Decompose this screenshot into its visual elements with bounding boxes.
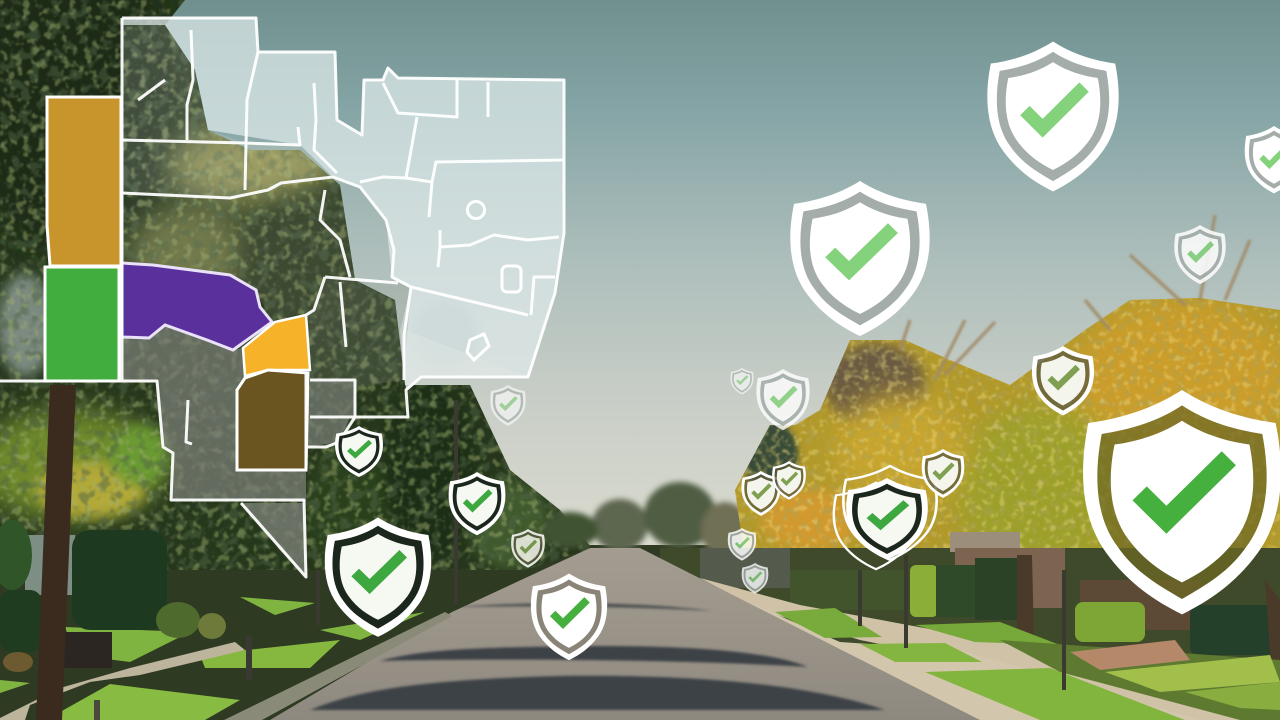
- left hedges and bench: [0, 385, 252, 720]
- right sidewalk and lawns: [650, 568, 1280, 720]
- region map: [0, 18, 564, 577]
- shield: road: [531, 574, 607, 660]
- region: green: [45, 267, 119, 381]
- shield: middle: [790, 181, 930, 336]
- shield: right edge: [1245, 126, 1280, 193]
- shield: centre tree: [449, 472, 505, 535]
- distant trees: [542, 482, 749, 558]
- shield: map coast: [490, 385, 526, 426]
- shield: cluster small: [922, 449, 964, 498]
- bare branches: [900, 215, 1250, 380]
- shield: roadside a: [728, 528, 756, 561]
- shield: cluster: [846, 478, 928, 560]
- ground behind houses: [660, 548, 1280, 720]
- shield: cluster ghost outlines: [834, 466, 937, 569]
- left lawns: [0, 597, 425, 720]
- region: olive: [237, 370, 308, 470]
- shield: large right: [1083, 390, 1280, 614]
- mist behind map: [413, 300, 477, 370]
- left trees: [0, 0, 620, 590]
- shields: [325, 42, 1280, 660]
- shield: map bottom: [335, 426, 383, 477]
- street poles: [318, 400, 1064, 690]
- right houses and hedges: [700, 532, 1280, 680]
- shield: tree a: [741, 471, 781, 516]
- right trees: [735, 298, 1280, 548]
- shield: roadside b: [742, 563, 768, 594]
- curb left: [224, 612, 452, 720]
- shield: centre small: [756, 369, 810, 430]
- map translucent regions: [122, 18, 564, 577]
- region: purple: [122, 263, 272, 350]
- map borders: [0, 18, 564, 577]
- region: ochre: [47, 97, 121, 266]
- shield: tree b: [772, 461, 806, 500]
- shield: upper right small: [1174, 225, 1226, 284]
- ground base: [0, 545, 1280, 720]
- shield: top centre right: [987, 42, 1119, 191]
- region: amber: [243, 315, 310, 376]
- road: [270, 548, 980, 720]
- shield: orange tree: [1032, 346, 1094, 415]
- ground left: [0, 570, 540, 720]
- sky background: [0, 0, 1280, 560]
- shield: far road: [511, 529, 545, 568]
- shield: tiny: [730, 368, 754, 395]
- road shadows: [310, 603, 885, 710]
- shield: lawn: [325, 518, 431, 637]
